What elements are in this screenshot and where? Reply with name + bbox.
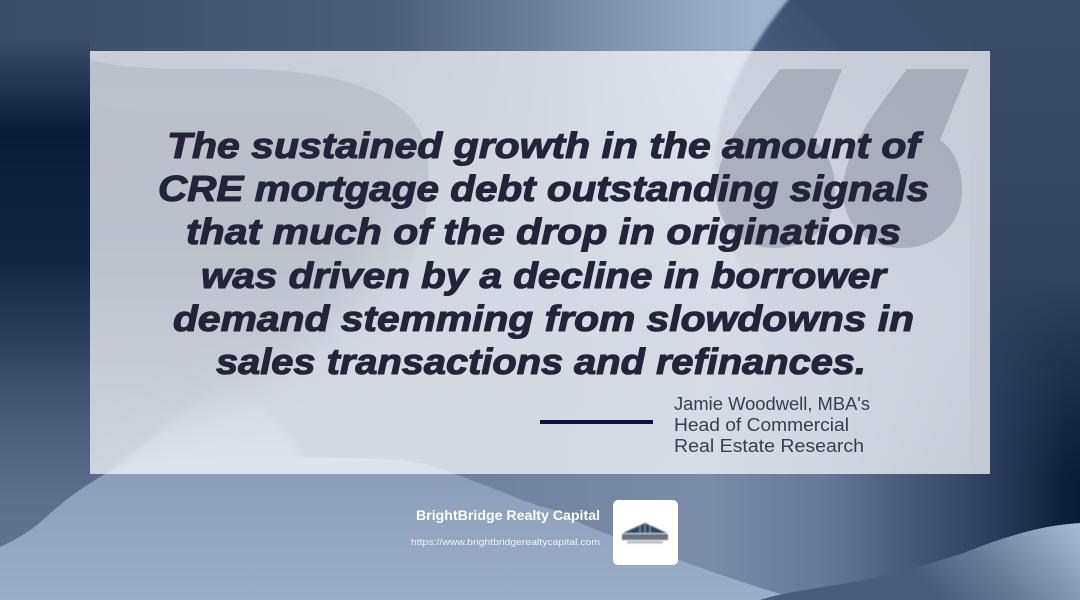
company name: BrightBridge Realty Capital: [416, 508, 600, 523]
quote text: demand stemming from slowdowns in: [173, 298, 914, 339]
company url: https://www.brightbridgerealtycapital.com: [411, 537, 600, 548]
attribution: [674, 394, 870, 456]
panel: quote card: [90, 51, 990, 474]
attribution: Head of Commercial: [674, 415, 849, 435]
quote text: was driven by a decline in borrower: [201, 255, 888, 296]
attribution: Jamie Woodwell, MBA's: [674, 394, 870, 414]
quote text: CRE mortgage debt outstanding signals: [158, 168, 929, 209]
quote text: sales transactions and refinances.: [216, 341, 866, 382]
quote text: that much of the drop in originations: [186, 211, 901, 252]
attribution: Real Estate Research: [674, 436, 864, 456]
quote text: [158, 125, 929, 382]
logo: [613, 500, 678, 565]
divider line: [540, 420, 653, 424]
quote text: The sustained growth in the amount of: [167, 125, 923, 166]
icon: quotation mark: [716, 69, 969, 248]
